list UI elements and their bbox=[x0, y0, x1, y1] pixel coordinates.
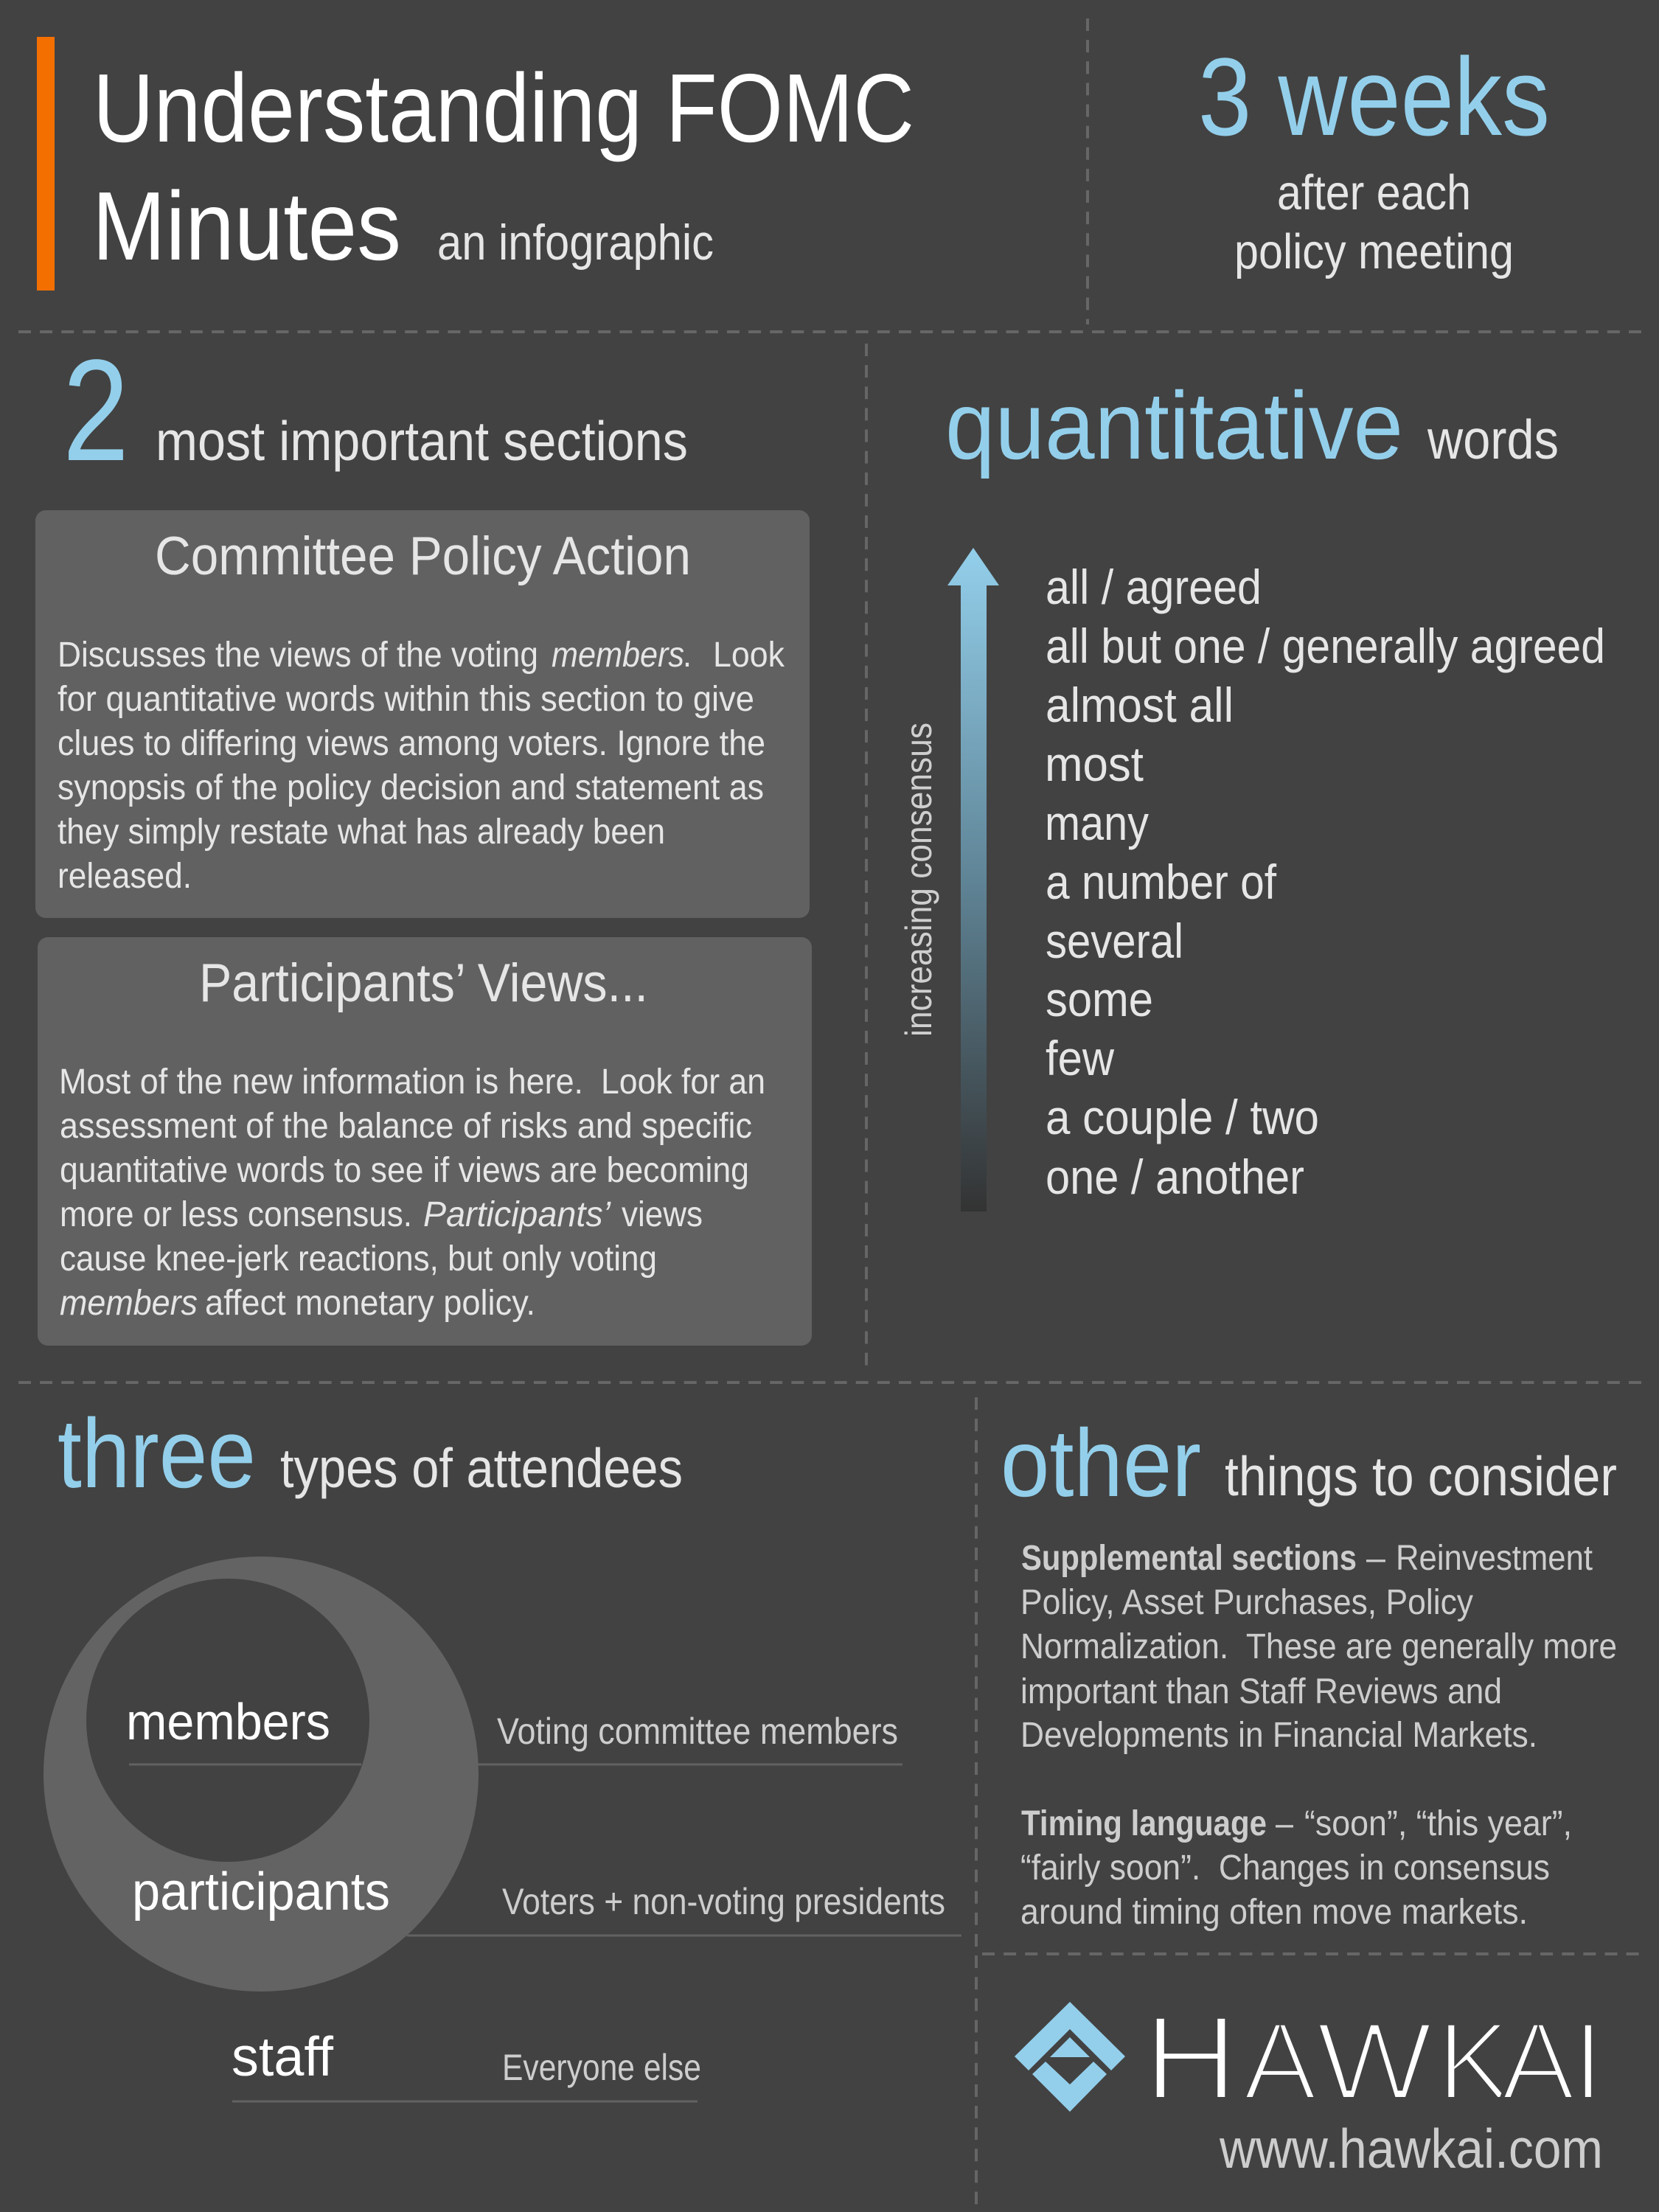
accent bar bbox=[37, 37, 55, 291]
list: quantitative words: almost all bbox=[1046, 678, 1234, 732]
panel: Participants' Views bbox=[38, 937, 812, 1346]
panel body text: more or less consensus. bbox=[60, 1195, 412, 1234]
panel body text: released. bbox=[58, 857, 192, 896]
circle: participants bbox=[44, 1557, 479, 1992]
wordmark: HAWKAI: W bbox=[1316, 1999, 1433, 2123]
list: quantitative words: all but one / generally agreed bbox=[1046, 619, 1605, 673]
text block: supplemental sections bbox=[1020, 1539, 1617, 1755]
list: quantitative words bbox=[1045, 560, 1605, 1204]
title: Minutes bbox=[92, 172, 401, 280]
diagram: attendee circles bbox=[44, 1557, 961, 2101]
panel heading: Committee Policy Action bbox=[155, 526, 691, 586]
text block: supplemental sections: – bbox=[1366, 1539, 1385, 1578]
panel body text: Look for an bbox=[601, 1062, 765, 1102]
heading: three types of attendees: types of attendees bbox=[280, 1437, 683, 1499]
title: Understanding FOMC bbox=[93, 54, 914, 162]
text block: supplemental sections: Reinvestment bbox=[1396, 1539, 1593, 1578]
heading: 2 most important sections bbox=[63, 330, 688, 491]
heading: quantitative words: words bbox=[1427, 408, 1559, 470]
panel body text: Look bbox=[713, 636, 785, 675]
label: increasing consensus: increasing consensus bbox=[898, 723, 939, 1037]
heading: other things to consider: other bbox=[1001, 1409, 1201, 1517]
list: quantitative words: most bbox=[1045, 737, 1144, 791]
title bbox=[92, 54, 914, 280]
panel body text: assessment of the balance of risks and specific bbox=[60, 1107, 752, 1146]
panel body text: synopsis of the policy decision and statement as bbox=[58, 768, 764, 807]
text block: timing language: Timing language bbox=[1021, 1804, 1267, 1843]
heading: other things to consider bbox=[1001, 1409, 1617, 1517]
text block: supplemental sections: Policy, Asset Purchases, Policy bbox=[1020, 1583, 1473, 1622]
panel body text: clues to differing views among voters. Ignore the bbox=[58, 724, 765, 763]
list: quantitative words: all / agreed bbox=[1046, 560, 1262, 614]
wordmark: HAWKAI: A bbox=[1243, 1999, 1317, 2123]
panel body text bbox=[58, 636, 785, 896]
text block: timing language: – bbox=[1276, 1804, 1293, 1843]
panel body text: they simply restate what has already been bbox=[58, 813, 665, 852]
text block: supplemental sections: Developments in Financial Markets. bbox=[1020, 1716, 1537, 1755]
text block: supplemental sections: important than Staff Reviews and bbox=[1020, 1672, 1502, 1711]
panel body text: quantitative words to see if views are becoming bbox=[60, 1151, 749, 1190]
callout: 3 weeks: 3 weeks bbox=[1198, 35, 1550, 159]
panel body text bbox=[59, 1062, 765, 1323]
text block: supplemental sections: Normalization. These are generally more bbox=[1020, 1627, 1617, 1666]
panel body text: members bbox=[60, 1284, 198, 1323]
heading: quantitative words: quantitative bbox=[945, 372, 1403, 479]
panel body text: . bbox=[683, 636, 692, 675]
list: quantitative words: few bbox=[1046, 1031, 1114, 1085]
heading: 2 most important sections: most important sections bbox=[156, 410, 688, 472]
panel body text: Participants’ bbox=[423, 1195, 611, 1234]
label: participants: participants bbox=[132, 1863, 390, 1921]
callout: 3 weeks: policy meeting bbox=[1234, 224, 1514, 279]
panel body text: members bbox=[552, 636, 684, 675]
description: staff: Everyone else bbox=[502, 2047, 701, 2088]
title: an infographic bbox=[437, 215, 714, 271]
heading: three types of attendees bbox=[58, 1399, 683, 1509]
website url: www.hawkai.com bbox=[1219, 2118, 1603, 2180]
description: participants: Voters + non-voting presidents bbox=[502, 1881, 945, 1922]
panel body text: Most of the new information is here. bbox=[59, 1062, 583, 1102]
heading: other things to consider: things to consider bbox=[1225, 1445, 1617, 1507]
text block: timing language: “fairly soon”. Changes in consensus bbox=[1020, 1848, 1550, 1888]
wordmark: HAWKAI: H bbox=[1144, 1990, 1238, 2125]
list: quantitative words: a number of bbox=[1046, 855, 1277, 909]
list: quantitative words: a couple / two bbox=[1046, 1090, 1319, 1144]
wordmark: HAWKAI: KAI bbox=[1437, 1999, 1604, 2123]
panel heading: Participants’ Views... bbox=[199, 953, 648, 1013]
heading: 2 most important sections: 2 bbox=[63, 330, 129, 491]
icon: Hawkai logo bbox=[1015, 2002, 1125, 2112]
list: quantitative words: many bbox=[1045, 796, 1149, 850]
callout: 3 weeks bbox=[1198, 35, 1550, 279]
wordmark: HAWKAI bbox=[1144, 1990, 1604, 2125]
heading: three types of attendees: three bbox=[58, 1399, 256, 1509]
text block: timing language: around timing often move markets. bbox=[1020, 1893, 1528, 1932]
arrow: increasing consensus bbox=[947, 548, 999, 1211]
panel body text: for quantitative words within this section to give bbox=[58, 680, 754, 719]
description: members: Voting committee members bbox=[497, 1711, 898, 1752]
panel body text: Discusses the views of the voting bbox=[58, 636, 538, 675]
text block: timing language bbox=[1020, 1804, 1572, 1932]
label: staff: staff bbox=[232, 2025, 333, 2087]
list: quantitative words: one / another bbox=[1046, 1150, 1304, 1204]
panel body text: affect monetary policy. bbox=[205, 1284, 535, 1323]
text block: timing language: “soon”, “this year”, bbox=[1304, 1804, 1572, 1843]
label: members: members bbox=[126, 1693, 330, 1750]
callout: 3 weeks: after each bbox=[1277, 165, 1471, 220]
circle: members bbox=[86, 1579, 369, 1862]
text block: supplemental sections: Supplemental sections bbox=[1021, 1539, 1357, 1578]
panel body text: views bbox=[622, 1195, 703, 1234]
list: quantitative words: some bbox=[1046, 972, 1153, 1026]
panel body text: cause knee-jerk reactions, but only voting bbox=[60, 1239, 657, 1279]
list: quantitative words: several bbox=[1046, 914, 1183, 968]
panel: Committee Policy Action bbox=[35, 510, 810, 918]
